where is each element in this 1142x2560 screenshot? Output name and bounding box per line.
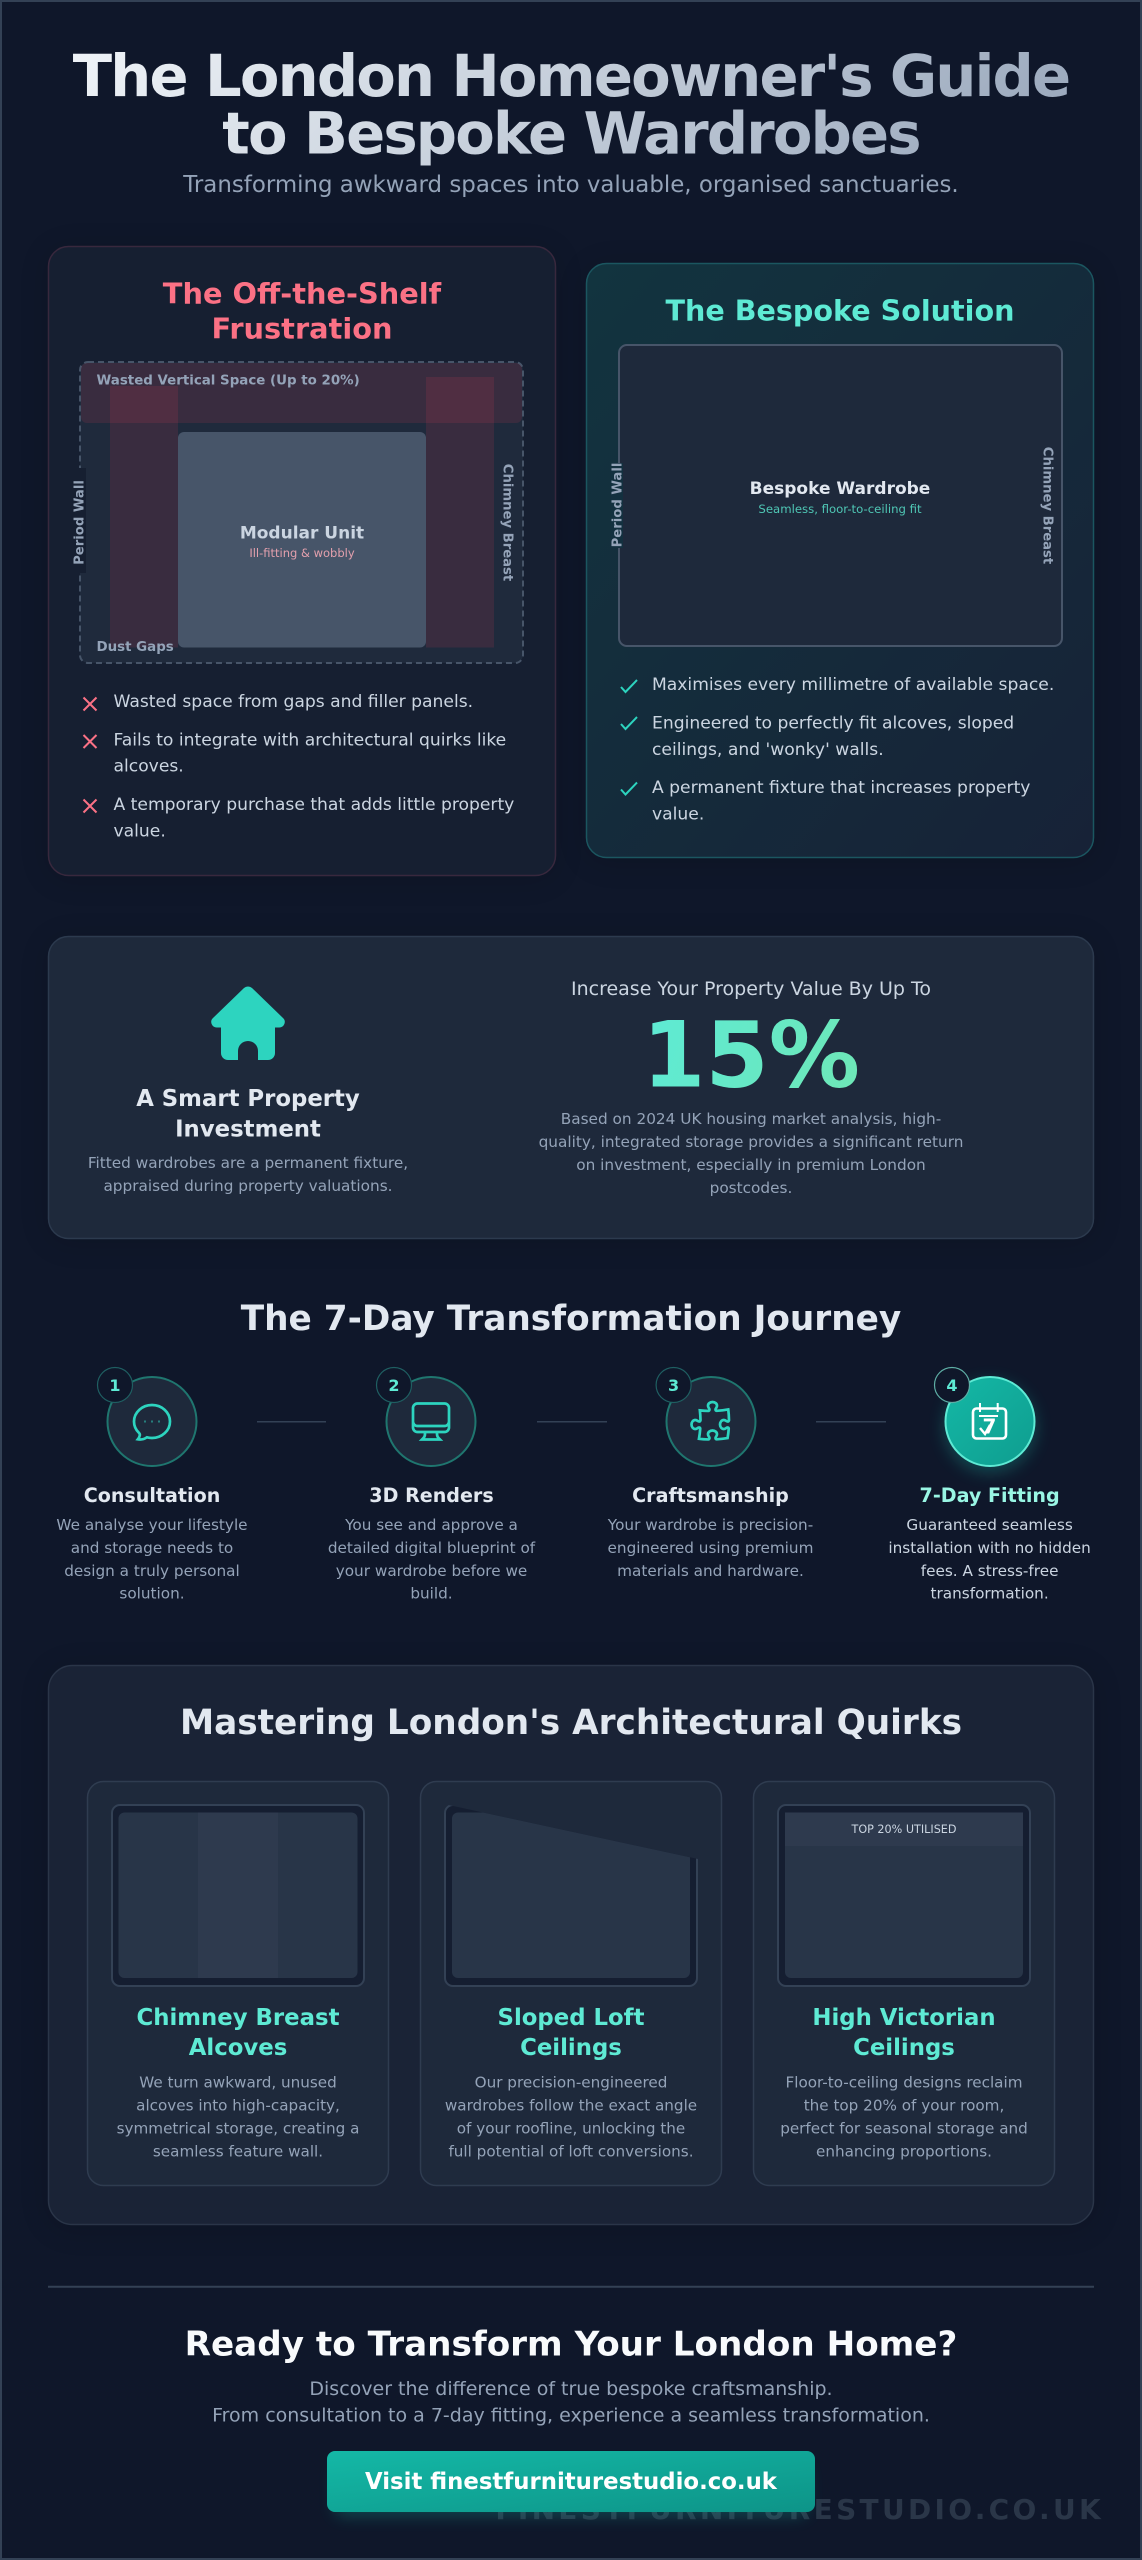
step text: and storage needs to bbox=[71, 1539, 233, 1557]
title: The London Homeowner's Guide bbox=[73, 43, 1069, 110]
card text bbox=[117, 2073, 359, 2160]
card title: Alcoves bbox=[189, 2035, 287, 2061]
card text: wardrobes follow the exact angle bbox=[445, 2096, 697, 2114]
badge 3: 3 bbox=[668, 1376, 679, 1395]
wasted vertical band bbox=[81, 363, 522, 423]
connector 3 bbox=[816, 1421, 886, 1423]
list: frustrations: Fails to integrate with architectural quirks like bbox=[114, 731, 506, 751]
step text: engineered using premium bbox=[608, 1539, 813, 1557]
card title: Chimney Breast bbox=[137, 2005, 340, 2031]
card title: High Victorian bbox=[812, 2005, 996, 2031]
connector 1 bbox=[257, 1421, 326, 1423]
panel: bespoke solution bbox=[586, 264, 1094, 862]
panel: property investment bbox=[48, 936, 1094, 1242]
cross icons bbox=[84, 698, 96, 812]
step text bbox=[56, 1516, 248, 1602]
card text: perfect for seasonal storage and bbox=[780, 2119, 1028, 2137]
label: chimney breast: Chimney Breast bbox=[1040, 447, 1054, 564]
text: fitted wardrobes: Fitted wardrobes are a permanent fixture, bbox=[88, 1154, 408, 1172]
badge 2 bbox=[376, 1368, 412, 1402]
heading: smart investment bbox=[136, 1086, 360, 1143]
watermark: FINESTFURNITURESTUDIO.CO.UK bbox=[495, 2493, 1104, 2526]
connector 2 bbox=[537, 1421, 607, 1423]
step text: materials and hardware. bbox=[617, 1562, 804, 1580]
list: benefits bbox=[621, 675, 1054, 824]
step text: We analyse your lifestyle bbox=[56, 1516, 248, 1534]
label: chimney breast: Chimney Breast bbox=[500, 464, 514, 581]
diagram: bespoke wardrobe: Bespoke Wardrobe bbox=[750, 479, 930, 499]
label: period wall: Period Wall bbox=[610, 463, 626, 547]
text: discover bbox=[212, 2378, 930, 2427]
card text: seamless feature wall. bbox=[153, 2142, 323, 2160]
list: frustrations: alcoves. bbox=[114, 757, 184, 777]
heading: off-the-shelf: Frustration bbox=[212, 312, 392, 346]
card: chimney breast alcoves bbox=[88, 1782, 388, 2186]
card text bbox=[780, 2073, 1028, 2160]
card title bbox=[812, 2005, 996, 2061]
step 4: 7-day fitting bbox=[888, 1368, 1091, 1602]
heading: quirks: Mastering London's Architectural Quirks bbox=[180, 1703, 962, 1743]
stat: 15 percent: 15% bbox=[642, 1004, 860, 1108]
text: market analysis: Based on 2024 UK housing market analysis, high- bbox=[561, 1110, 941, 1128]
card title: Sloped Loft bbox=[498, 2005, 645, 2031]
card text: enhancing proportions. bbox=[816, 2142, 992, 2160]
card text: full potential of loft conversions. bbox=[448, 2142, 694, 2160]
badge 2: 2 bbox=[388, 1376, 400, 1395]
card title bbox=[137, 2005, 340, 2061]
step title: 7-Day Fitting bbox=[920, 1484, 1060, 1507]
badge 3 bbox=[656, 1368, 691, 1402]
illustration: chimney bbox=[112, 1805, 364, 1986]
list: frustrations: A temporary purchase that adds little property bbox=[114, 795, 514, 815]
badge 4 bbox=[934, 1368, 970, 1402]
text: fitted wardrobes: appraised during property valuations. bbox=[103, 1177, 393, 1195]
step title: Consultation bbox=[84, 1484, 220, 1507]
card: sloped loft ceilings bbox=[420, 1782, 722, 2186]
illustration: slope bbox=[445, 1805, 697, 1986]
illustration: top section: TOP 20% UTILISED bbox=[850, 1823, 957, 1836]
list: benefits: Maximises every millimetre of available space. bbox=[652, 675, 1054, 695]
step text bbox=[888, 1516, 1091, 1602]
illustration: top section bbox=[778, 1805, 1030, 1986]
card text: Floor-to-ceiling designs reclaim bbox=[785, 2073, 1023, 2091]
panel: architectural quirks bbox=[48, 1666, 1094, 2229]
step 2: 3D renders bbox=[328, 1368, 536, 1602]
card text: Our precision-engineered bbox=[475, 2073, 667, 2091]
text: discover: Discover the difference of true bespoke craftsmanship. bbox=[309, 2378, 833, 2400]
title bbox=[73, 43, 1069, 168]
list: benefits: A permanent fixture that increases property bbox=[652, 778, 1030, 798]
text: fitted wardrobes bbox=[88, 1154, 408, 1195]
list: benefits: ceilings, and 'wonky' walls. bbox=[652, 740, 884, 760]
card text: alcoves into high-capacity, bbox=[136, 2096, 340, 2114]
step text: Guaranteed seamless bbox=[906, 1516, 1073, 1534]
card text: symmetrical storage, creating a bbox=[117, 2119, 359, 2137]
card: high victorian ceilings bbox=[754, 1782, 1054, 2186]
panel: off-the-shelf frustration bbox=[48, 246, 556, 879]
diagram: bespoke wardrobe: Seamless, floor-to-ceiling fit bbox=[758, 502, 922, 516]
card title: Ceilings bbox=[520, 2035, 622, 2061]
diagram: bespoke wardrobe bbox=[610, 345, 1062, 646]
card text bbox=[445, 2073, 697, 2160]
step title: Craftsmanship bbox=[632, 1484, 789, 1507]
icon: chat bbox=[134, 1405, 170, 1440]
diagram: modular unit in alcove bbox=[72, 362, 523, 663]
list: frustrations bbox=[84, 692, 514, 842]
section: 7-day journey bbox=[56, 1299, 1091, 1602]
step text: You see and approve a bbox=[344, 1516, 518, 1534]
step text: your wardrobe before we bbox=[336, 1562, 527, 1580]
text: market analysis: quality, integrated storage provides a significant return bbox=[539, 1133, 963, 1151]
list: benefits: Engineered to perfectly fit alcoves, sloped bbox=[652, 714, 1014, 734]
step text: solution. bbox=[119, 1584, 185, 1602]
heading: smart investment: A Smart Property bbox=[136, 1086, 360, 1112]
badge 4: 4 bbox=[946, 1376, 958, 1395]
heading: ready to transform: Ready to Transform Your London Home? bbox=[185, 2325, 957, 2365]
list: benefits: value. bbox=[652, 804, 704, 824]
step text: installation with no hidden bbox=[888, 1539, 1091, 1557]
text: discover: From consultation to a 7-day fitting, experience a seamless transformation. bbox=[212, 2405, 930, 2427]
icon: puzzle bbox=[692, 1402, 729, 1439]
card text: the top 20% of your room, bbox=[804, 2096, 1004, 2114]
step text: detailed digital blueprint of bbox=[328, 1539, 536, 1557]
label: wasted space: Wasted Vertical Space (Up to 20%) bbox=[96, 374, 360, 388]
step text: transformation. bbox=[931, 1584, 1049, 1602]
badge 1 bbox=[98, 1368, 132, 1402]
modular unit: Ill-fitting & wobbly bbox=[249, 546, 355, 560]
icon: house bbox=[211, 986, 285, 1060]
header bbox=[73, 43, 1069, 198]
card title bbox=[498, 2005, 645, 2061]
heading: off-the-shelf: The Off-the-Shelf bbox=[163, 277, 442, 311]
right gap bbox=[426, 377, 494, 648]
step title: 3D Renders bbox=[369, 1484, 494, 1507]
list: frustrations: Wasted space from gaps and filler panels. bbox=[114, 692, 473, 712]
icon: calendar bbox=[973, 1403, 1006, 1438]
icon: monitor bbox=[413, 1404, 449, 1440]
subtitle: Transforming awkward spaces into valuable, organised sanctuaries. bbox=[182, 172, 959, 198]
step 1: consultation bbox=[56, 1368, 248, 1602]
heading: smart investment: Investment bbox=[175, 1117, 321, 1143]
heading: journey: The 7-Day Transformation Journey bbox=[241, 1299, 901, 1339]
step text: build. bbox=[410, 1584, 453, 1602]
heading: off-the-shelf bbox=[163, 277, 442, 346]
heading: bespoke solution: The Bespoke Solution bbox=[666, 293, 1014, 327]
text: market analysis: postcodes. bbox=[710, 1179, 792, 1197]
step 3: craftsmanship bbox=[607, 1368, 813, 1580]
step text: fees. A stress-free bbox=[921, 1562, 1058, 1580]
title: to Bespoke Wardrobes bbox=[222, 101, 920, 168]
card text: of your roofline, unlocking the bbox=[457, 2119, 685, 2137]
card text: We turn awkward, unused bbox=[139, 2073, 337, 2091]
step text bbox=[607, 1516, 813, 1580]
step text bbox=[328, 1516, 536, 1602]
modular unit: Modular Unit bbox=[240, 524, 364, 544]
step text: design a truly personal bbox=[64, 1562, 240, 1580]
icon: calendar: 7 bbox=[983, 1414, 996, 1438]
step text: Your wardrobe is precision- bbox=[607, 1516, 813, 1534]
button: Visit finestfurniturestudio.co.uk bbox=[365, 2469, 778, 2495]
footer call to action bbox=[48, 2287, 1104, 2526]
label: dust gaps: Dust Gaps bbox=[96, 640, 174, 655]
left gap bbox=[110, 386, 178, 648]
text: increase value: Increase Your Property Value By Up To bbox=[571, 978, 931, 1000]
list: frustrations: value. bbox=[114, 822, 166, 842]
text: market analysis bbox=[539, 1110, 963, 1197]
label: period wall: Period Wall bbox=[72, 480, 88, 565]
text: market analysis: on investment, especially in premium London bbox=[576, 1156, 926, 1174]
button bbox=[327, 2451, 815, 2516]
badge 1: 1 bbox=[109, 1376, 121, 1395]
modular unit bbox=[178, 432, 426, 648]
check icons bbox=[621, 680, 637, 794]
card title: Ceilings bbox=[853, 2035, 955, 2061]
